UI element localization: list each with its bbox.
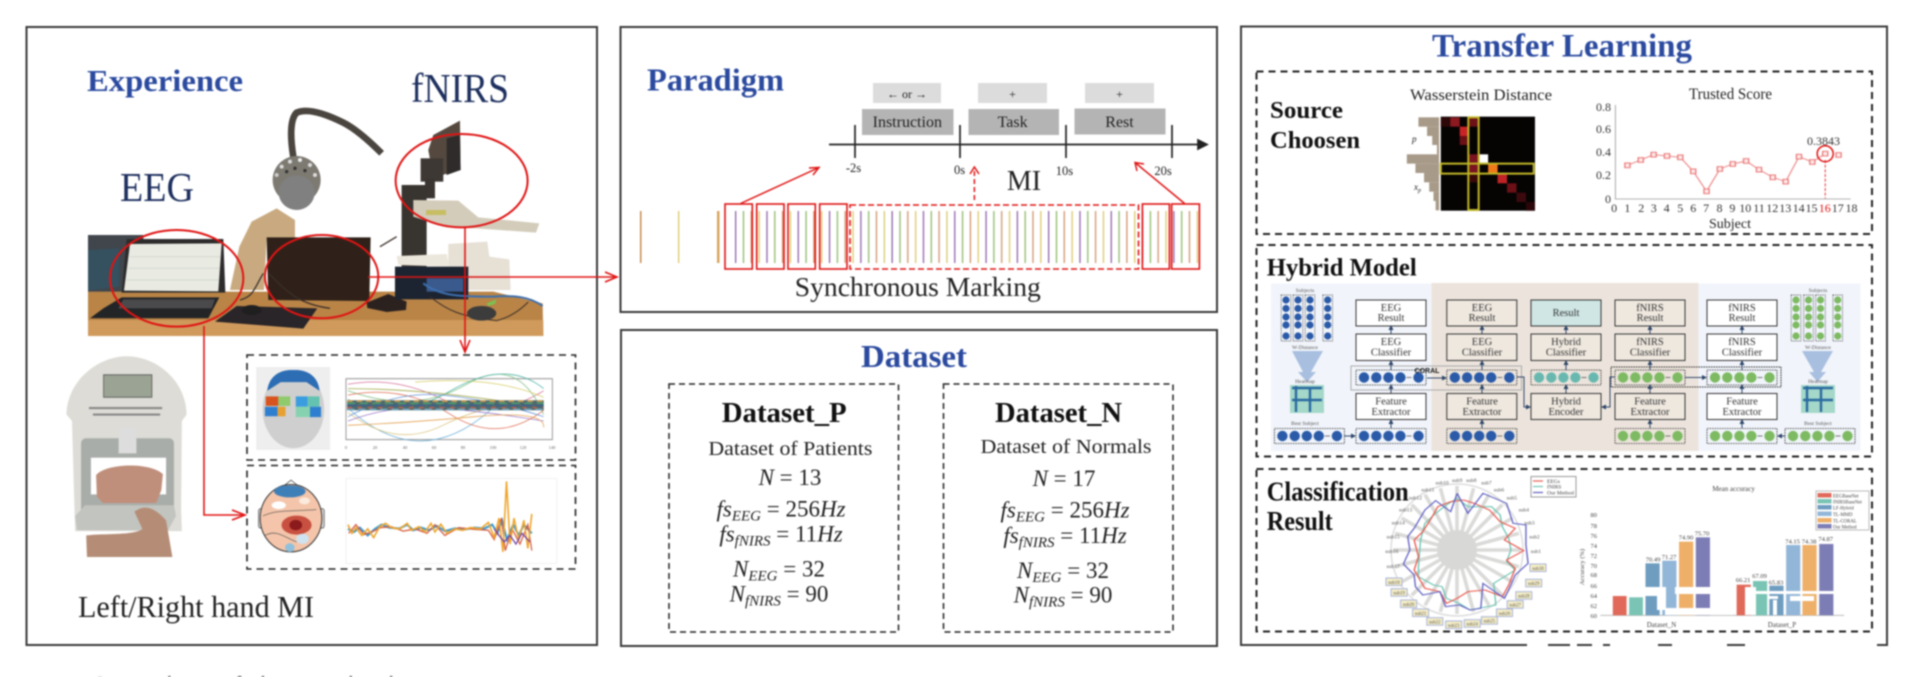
diagram background [1271,283,1860,451]
bar axis ticks: 68 [1590,572,1597,579]
radar patient labels: sub21 [1415,612,1427,617]
label: Trusted Score: Trusted Score [1689,86,1772,103]
red circles marking devices [110,134,528,327]
column: fNIRS source branch: fNIRS [1728,303,1756,314]
line chart: trusted score: 11 [1753,201,1765,215]
dataset card: normals: = 90 [1065,582,1112,608]
watermark: white overlay bottom right [1527,587,1877,650]
line chart: trusted score: 10 [1739,201,1751,215]
subject selection: EEG [1274,288,1344,444]
plot axis labels: 100 [490,445,497,450]
bar axis ticks: 62 [1590,603,1597,610]
bar axis ticks: 76 [1590,533,1598,540]
radar subject labels: sub6 [1494,487,1504,493]
dataset card: normals: fs [1000,498,1016,522]
timeline labels [846,161,1172,178]
radar patient labels: sub27 [1509,604,1522,608]
plot axis labels: 40 [403,445,408,450]
column: fNIRS target branch: Feature [1634,396,1666,408]
line chart: trusted score: 7 [1703,201,1709,215]
radar subject labels: sub2 [1529,535,1540,541]
radar patient labels: sub18 [1388,581,1400,586]
bar values: 75.70 [1695,530,1709,538]
heading: Dataset: Dataset [861,338,967,374]
dataset card: patients: = 256 [761,496,820,522]
dataset card: patients: Dataset_P [722,397,847,429]
bar axis ticks: 70 [1590,563,1597,570]
EEG laptop [90,239,225,318]
timeline labels: 20s [1154,164,1172,178]
alignment frames and CORAL label: CORAL [1415,368,1440,375]
column: EEG target branch: Classifier [1462,348,1503,358]
radar subject labels [1385,478,1541,570]
EEG topographic head map [259,480,324,552]
line chart: trusted score: 15 [1806,201,1818,215]
dataset card: normals: N = 17 [1032,466,1095,491]
dataset card: patients: = 32 [778,556,825,582]
timeline labels: 10s [1056,164,1073,178]
fNIRS signal plot [346,374,552,441]
bar axis ticks: 60 [1590,613,1597,620]
column: EEG source branch: EEG [1381,337,1402,348]
radar patient labels: sub23 [1448,624,1460,629]
dataset card: normals: = 32 [1062,558,1109,583]
bar chart: mean accuracy: Mean accuracy [1712,485,1755,493]
column: fNIRS target branch: fNIRS [1636,303,1664,314]
column: fNIRS target branch: Result [1637,313,1663,324]
dataset card: patients: fNIRS [735,534,771,550]
radar subject labels: sub7 [1481,481,1492,487]
column: hybrid branch: Encoder [1549,407,1584,418]
bar chart: mean accuracy [1579,485,1869,629]
synchronous marking bars [640,211,1204,263]
bar values: 74.90 [1679,534,1693,542]
bar values: 67.09 [1752,573,1767,580]
bar axis ticks: 80 [1590,512,1597,519]
column: hybrid branch: Hybrid [1551,337,1582,348]
radar subject labels: sub16 [1385,549,1399,555]
timeline stimulus boxes: Instruction [873,114,942,131]
timeline axis [829,125,1207,158]
alignment frames and CORAL label [1351,366,1781,390]
radar subject labels: sub9 [1452,478,1463,484]
radar patient labels: sub24 [1466,622,1479,628]
bar values: 74.15 [1785,538,1800,546]
dataset card: normals: = 256 [1045,498,1104,522]
column: EEG target branch: Result [1469,313,1495,324]
heatmap: Wasserstein distance [1407,117,1535,211]
dashed box: fNIRS data [247,355,576,460]
line chart: trusted score: 0 [1605,192,1611,206]
fNIRS device [395,121,543,321]
line chart: trusted score: 1 [1624,201,1630,215]
subject selection: EEG: Heatmap [1295,379,1315,385]
column: fNIRS source branch: Classifier [1722,348,1763,358]
dataset card: patients: fs [719,522,735,546]
radar patient labels: sub28 [1518,594,1530,600]
bar axis ticks [1590,512,1598,620]
radar subject labels: sub14 [1392,520,1405,526]
timeline labels: -2s [846,161,861,175]
radar patient labels: sub30 [1532,567,1544,572]
plot axis labels [345,445,556,450]
label: Source Choosen [1270,97,1360,154]
panel: transfer learning [1241,26,1887,645]
bar legend: EEGBaseNet [1833,494,1859,500]
line chart: trusted score: 8 [1716,201,1722,215]
dataset card: normals: EEG [1015,510,1045,526]
dataset card: patients: N = 13 [758,465,821,490]
dataset card: patients: fs [716,496,732,522]
line chart: trusted score: 13 [1779,201,1791,215]
marginal labels: p [1411,134,1417,144]
line chart: trusted score: 5 [1677,201,1683,215]
label: MI: MI [1007,166,1041,197]
plot axis labels: 80 [461,445,466,450]
dataset card: patients: Dataset of Patients [708,438,873,460]
dataset card: patients: EEG [747,568,778,584]
line chart: trusted score [1596,100,1858,232]
column: fNIRS source branch: fNIRS [1728,337,1756,348]
radar patient labels: sub19 [1393,592,1405,596]
line chart: trusted score: 0 [1611,201,1617,215]
dataset card: normals: Hz [1100,523,1127,548]
line chart: trusted score: 2 [1638,201,1644,215]
radar legend: fNIRS [1547,484,1561,490]
bar axis ticks: 66 [1590,583,1598,590]
radar chart: per-subject accuracy [1385,478,1546,629]
bar values: 74.38 [1802,538,1816,546]
plot axis labels: 120 [520,445,527,450]
bar values: 71.27 [1662,554,1677,561]
column: hybrid branch: Result [1553,308,1579,319]
line chart: trusted score: 14 [1793,201,1805,215]
bar chart: mean accuracy: Accuracy (%) [1579,549,1586,585]
radar subject labels: sub10 [1436,481,1449,487]
timeline stimulus boxes: ← or → [887,87,927,101]
subject selection: fNIRS: Subjects [1809,288,1827,294]
panel: dataset [621,330,1217,646]
dataset card: normals: Hz [1103,498,1130,522]
label: Classification Result: Result [1267,506,1333,536]
line chart: trusted score: 16 [1819,201,1831,215]
dataset card: patients: Hz [819,496,846,522]
radar subject labels: sub12 [1409,495,1422,501]
bar legend: fNIRSBaseNet [1833,500,1862,506]
column: fNIRS source branch: Result [1729,313,1755,324]
photo: hand on grip dynamometer [66,356,187,557]
brain activation map [256,367,330,450]
column: EEG source branch: Feature [1375,396,1407,408]
column: fNIRS target branch: Classifier [1630,348,1671,358]
radar subject labels: sub17 [1387,564,1400,570]
EEG signal plot [346,478,557,563]
arrows to timeline [741,162,1185,204]
plot axis labels: 20 [373,445,378,450]
photo: experiment setup with subject, laptops and fNIRS device [88,111,543,336]
label: Classification Result [1267,476,1409,536]
subject selection: fNIRS [1785,288,1855,444]
bar values: 66.21 [1736,577,1750,584]
timeline stimulus boxes [862,83,1166,135]
bar legend: TL-MMD [1833,513,1853,518]
radar subject labels: sub3 [1524,520,1535,526]
bar legend: Our Method [1833,526,1857,530]
line chart: trusted score: 0.4 [1596,145,1611,159]
column: EEG target branch: EEG [1472,337,1493,348]
bar axis ticks: 78 [1590,523,1597,530]
bar axis ticks: 74 [1590,543,1598,550]
arrow: EEG to EEG data [204,326,245,520]
radar legend [1531,476,1576,497]
bar axis ticks: 72 [1590,553,1597,560]
label: fNIRS: fNIRS [411,65,509,111]
bar values: 74.87 [1818,536,1834,543]
arrow: fNIRS to fNIRS data [460,228,470,352]
timeline stimulus boxes: + [1116,87,1123,101]
timeline labels: 0s [954,163,965,177]
line chart: trusted score: 17 [1832,201,1844,215]
dataset card: patients: N [729,582,747,606]
radar subject labels: sub13 [1399,507,1412,513]
column: fNIRS target branch: fNIRS [1636,337,1664,348]
plot axis labels: 0 [345,445,348,450]
timeline stimulus boxes: + [1009,87,1016,101]
column: hybrid branch: Hybrid [1551,396,1582,408]
dataset card: normals: N [1013,582,1031,608]
column: EEG target branch [1447,300,1517,444]
column: fNIRS target branch [1615,300,1685,444]
label: EEG: EEG [120,164,194,210]
column: hybrid branch [1531,300,1601,420]
dataset card: patients: N [732,556,750,582]
bar values [1646,530,1834,586]
dataset card: patients: = 11 [770,522,817,546]
column: EEG target branch: EEG [1472,303,1493,314]
line chart: trusted score: 6 [1690,201,1696,215]
radar subject labels: sub5 [1507,495,1517,501]
column: fNIRS source branch: Extractor [1722,407,1762,418]
column: fNIRS source branch: Feature [1726,396,1758,408]
line chart: trusted score: 12 [1766,201,1778,215]
radar legend: EEGs [1547,479,1560,485]
heading: Transfer Learning: Transfer Learning [1432,28,1692,64]
radar subject labels: sub1 [1531,549,1541,555]
sub-panel: source chosen: x [1414,182,1418,192]
radar patient labels: sub29 [1528,582,1540,587]
subject shirt [230,208,295,290]
bar chart: mean accuracy: Dataset_P [1768,621,1796,629]
heading: Paradigm: Paradigm [647,62,784,98]
bar legend [1816,491,1869,530]
panel: paradigm [620,27,1217,312]
column: EEG source branch: Classifier [1371,348,1412,358]
sub-panel: source chosen: p [1417,188,1421,194]
label: Classification Result: Classification [1267,476,1409,506]
dataset card: patients: EEG [731,508,761,524]
label: Source Choosen: Choosen [1270,127,1360,154]
flow arrows [1344,326,1785,436]
dashed box: EEG data [247,466,576,569]
line chart: trusted score: 9 [1729,201,1735,215]
line chart: trusted score: 0.2 [1596,168,1611,182]
red marker boxes [725,204,1199,269]
radar legend: Our Method [1547,490,1574,496]
dataset card: normals: EEG [1031,570,1062,586]
radar patient labels: sub25 [1484,620,1496,624]
line chart: trusted score: 0.8 [1596,100,1611,114]
line chart: trusted score: Subject [1709,217,1751,232]
cable arm [291,111,382,157]
dataset card: normals [944,384,1173,632]
timeline stimulus boxes: Task [998,114,1028,131]
subject selection: EEG: Subjects [1296,288,1314,294]
sub-panel: hybrid model [1256,245,1872,456]
radar subject labels: sub15 [1387,535,1400,541]
radar patient labels [1386,564,1546,629]
bar chart: mean accuracy: Dataset_N [1647,621,1676,629]
dataset card: patients: = 90 [781,582,828,606]
column: fNIRS source branch [1707,300,1777,444]
line chart: trusted score: 0.3843 [1807,134,1840,148]
heading: Experience: Experience [87,63,243,98]
column: hybrid branch: Classifier [1546,348,1587,358]
second laptop [267,237,371,301]
plot axis labels: 60 [432,445,437,450]
dataset card: normals: Dataset_N [995,397,1122,429]
dataset card: normals: fNIRS [1029,594,1065,610]
line chart: trusted score: 0.6 [1596,122,1611,136]
dataset card: normals: Dataset of Normals [980,436,1152,458]
column: EEG source branch: Result [1378,313,1404,324]
line chart: trusted score: 3 [1651,201,1657,215]
column: EEG source branch [1356,300,1426,444]
dataset card: patients [669,384,898,632]
radar patient labels: sub20 [1403,603,1415,608]
column: fNIRS target branch: Extractor [1630,407,1670,418]
radar patient labels: sub22 [1429,620,1441,626]
timeline stimulus boxes: Rest [1105,114,1134,131]
bar legend: LF-Hybrid [1833,506,1854,512]
dataset card: normals: N [1016,558,1034,583]
label: Source Choosen: Source [1270,97,1343,124]
line chart: trusted score: 18 [1846,201,1858,215]
bar values: 65.83 [1769,580,1783,586]
sub-panel: classification result [1256,469,1872,632]
subject selection: fNIRS: Heatmap [1808,379,1828,385]
bar legend: TL-CORAL [1833,520,1857,524]
subject selection: fNIRS: Best Subject [1804,421,1832,427]
radar patient labels: sub26 [1499,612,1511,617]
caption: Left/Right hand MI: Left/Right hand MI [78,589,314,624]
dataset card: normals: fs [1003,523,1019,548]
line chart: trusted score: 4 [1664,201,1670,215]
column: EEG target branch: Feature [1466,396,1498,408]
dataset card: normals: fNIRS [1019,535,1055,551]
label: Hybrid Model: Hybrid Model [1267,254,1417,282]
bar values: 70.49 [1646,556,1660,564]
bar axis ticks: 64 [1590,593,1598,600]
column: EEG source branch: Extractor [1371,407,1411,418]
plot axis labels: 140 [549,445,556,450]
radar subject labels: sub4 [1519,507,1529,513]
radar subject labels: sub11 [1421,487,1435,493]
panel: experience [26,27,597,645]
arrow: laptop to paradigm [368,272,617,282]
EEG cap and masked face [273,156,321,210]
sub-panel: source chosen [1256,72,1872,234]
subject selection: EEG: Best Subject [1291,421,1319,427]
dataset card: patients: Hz [816,522,843,546]
label: Synchronous Marking: Synchronous Marking [795,272,1041,302]
column: EEG source branch: EEG [1381,303,1402,314]
label: Wasserstein Distance: Wasserstein Distance [1410,87,1552,104]
dataset card: patients: fNIRS [745,594,781,610]
subject selection: EEG: W-Distance [1292,345,1319,351]
subject selection: fNIRS: W-Distance [1805,345,1832,351]
dataset card: normals: = 11 [1054,523,1101,548]
radar subject labels: sub8 [1466,478,1477,484]
column: EEG target branch: Extractor [1462,407,1502,418]
